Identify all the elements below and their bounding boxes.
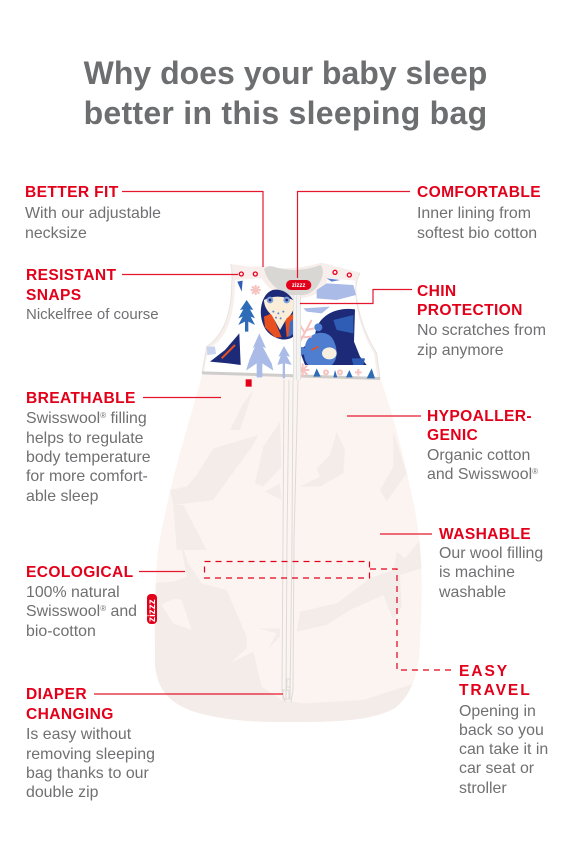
callout: diaper changing: DIAPER [26, 686, 87, 703]
callout: breathable: Swisswool [26, 410, 100, 427]
callout: diaper changing: removing sleeping [26, 746, 155, 763]
title: Why does your baby sleep [84, 55, 487, 91]
callout: diaper changing: double zip [26, 784, 99, 801]
callout: easy travel: TRAVEL [459, 682, 532, 699]
callout: comfortable: softest bio cotton [417, 225, 537, 242]
dashed pocket opening [204, 562, 452, 670]
callout: breathable: body temperature [26, 449, 151, 466]
callout: better fit: BETTER FIT [25, 184, 119, 201]
title: better in this sleeping bag [84, 95, 487, 131]
callout: hypoallergenic: and Swisswool [427, 466, 532, 483]
callout: breathable: for more comfort- [26, 468, 148, 485]
logo tag [286, 280, 311, 290]
callout: diaper changing [26, 686, 155, 801]
callout: easy travel: EASY [459, 663, 509, 680]
sleeping bag illustration [155, 262, 422, 722]
callout: diaper changing: bag thanks to our [26, 765, 150, 782]
callout: better fit [25, 184, 161, 242]
callout: easy travel: can take it in [459, 741, 548, 758]
callout: ecological: bio-cotton [26, 623, 96, 640]
callout: breathable: filling [106, 410, 147, 427]
callout: diaper changing: Is easy without [26, 726, 132, 743]
callout: ecological: and [106, 603, 137, 620]
callout: washable: washable [438, 584, 506, 601]
callout: resistant snaps [26, 267, 159, 323]
callout: ecological [26, 564, 137, 640]
bear [298, 309, 367, 365]
callout: resistant snaps: SNAPS [26, 287, 81, 304]
callout: ecological: 100% natural [26, 584, 120, 601]
callout: comfortable: Inner lining from [417, 205, 531, 222]
callout: better fit: necksize [25, 225, 87, 242]
callout: breathable: able sleep [26, 488, 99, 505]
callout: hypoallergenic: GENIC [427, 427, 478, 444]
callout: ecological: ECOLOGICAL [26, 564, 134, 581]
callout: easy travel [459, 663, 548, 797]
callout: easy travel: back so you [459, 722, 544, 739]
callout: breathable: helps to regulate [26, 430, 144, 447]
callout: resistant snaps: RESISTANT [26, 267, 116, 284]
callout: diaper changing: CHANGING [26, 706, 114, 723]
callout: ecological: ® [100, 604, 106, 613]
callout: ecological: Swisswool [26, 603, 100, 620]
callout: hypoallergenic: Organic cotton [427, 447, 530, 464]
callout: chin protection: PROTECTION [417, 302, 523, 319]
callout: breathable [26, 390, 151, 505]
callout: comfortable: COMFORTABLE [417, 184, 541, 201]
callout: easy travel: stroller [459, 780, 507, 797]
callout: washable [438, 526, 543, 601]
callout: breathable: ® [100, 411, 106, 420]
callout: chin protection [417, 283, 546, 359]
callout: washable: Our wool filling [439, 545, 543, 562]
callout: breathable: BREATHABLE [26, 390, 136, 407]
callout: hypoallergenic: HYPOALLER- [427, 408, 532, 425]
leader lines [94, 192, 432, 694]
trees and decoration [207, 278, 375, 378]
callout: hypoallergenic [427, 408, 538, 483]
vest top with print [202, 263, 381, 387]
callout: hypoallergenic: ® [532, 467, 538, 476]
callout: chin protection: No scratches from [417, 322, 546, 339]
logo: vertical zizzz: zizzz [147, 599, 158, 622]
callout: washable: WASHABLE [439, 526, 531, 543]
callout: chin protection: CHIN [417, 283, 457, 300]
owl [261, 290, 299, 340]
zipper [282, 380, 298, 702]
callout: better fit: With our adjustable [25, 205, 161, 222]
callout: resistant snaps: Nickelfree of course [26, 306, 159, 323]
logo tag: zizzz [292, 283, 305, 289]
callout: chin protection: zip anymore [417, 342, 504, 359]
callout: easy travel: Opening in [459, 703, 536, 720]
callout: comfortable [417, 184, 541, 242]
bag body [155, 374, 422, 722]
callout: easy travel: car seat or [459, 760, 535, 777]
title [84, 55, 487, 131]
callout: washable: is machine [439, 564, 515, 581]
